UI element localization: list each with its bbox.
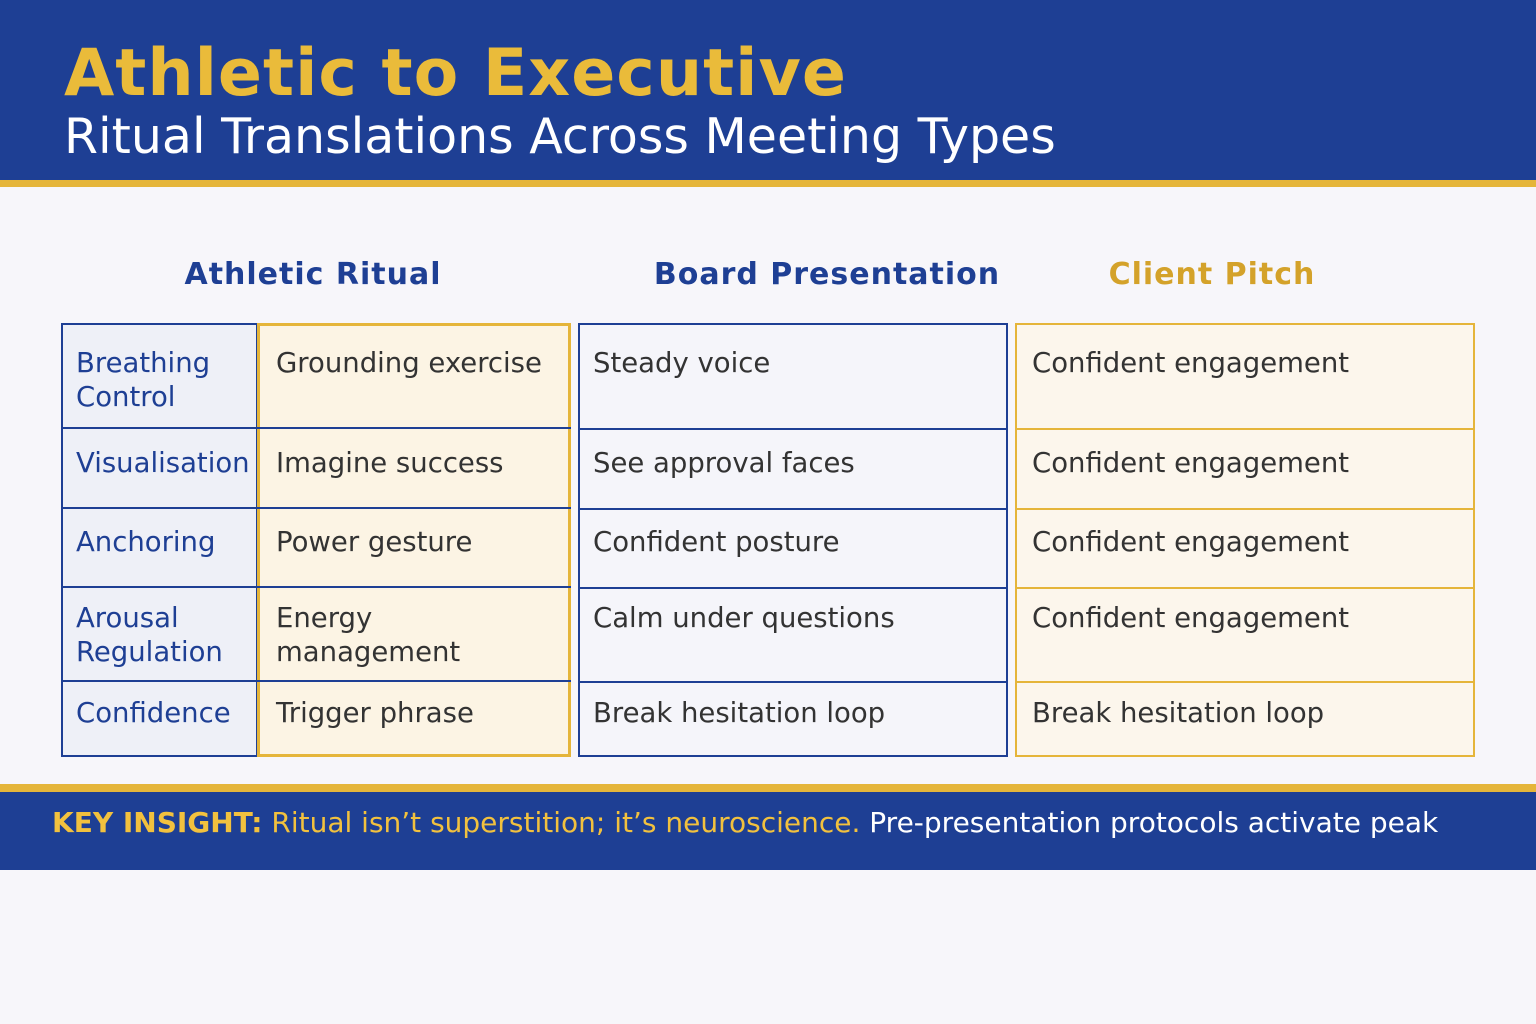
column headings <box>184 257 1315 292</box>
athletic techniques column <box>257 323 571 757</box>
table: board presentation <box>578 323 1008 757</box>
table: board presentation: Break hesitation loop <box>593 697 885 729</box>
table: board presentation: See approval faces <box>593 447 855 479</box>
table: athletic ritual: Anchoring <box>76 526 215 558</box>
subtitle: Ritual Translations Across Meeting Types <box>64 108 1056 165</box>
table: athletic ritual: Breathing <box>76 347 210 379</box>
table: athletic ritual: Visualisation <box>76 447 250 479</box>
table: board presentation: Calm under questions <box>593 602 895 634</box>
table: board presentation: Confident posture <box>593 526 840 558</box>
table: athletic ritual: Power gesture <box>276 526 472 558</box>
table: athletic ritual: Regulation <box>76 636 223 668</box>
table: client pitch: Confident engagement <box>1032 526 1349 558</box>
table: athletic ritual: Grounding exercise <box>276 347 542 379</box>
table: board presentation: Steady voice <box>593 347 770 379</box>
footer key insight <box>0 784 1536 870</box>
heading: client pitch: Client Pitch <box>1109 257 1315 292</box>
table: athletic ritual: Control <box>76 381 175 413</box>
ritual names column <box>61 323 258 757</box>
table: client pitch: Confident engagement <box>1032 447 1349 479</box>
table: athletic ritual: Trigger phrase <box>276 697 474 729</box>
table: athletic ritual: Imagine success <box>276 447 504 479</box>
table: athletic ritual: Arousal <box>76 602 179 634</box>
table: athletic ritual: Confidence <box>76 697 231 729</box>
table: client pitch <box>1015 323 1475 757</box>
heading: athletic ritual: Athletic Ritual <box>184 257 442 292</box>
table: athletic ritual: management <box>276 636 460 668</box>
table: client pitch: Confident engagement <box>1032 602 1349 634</box>
table: athletic ritual: Energy <box>276 602 372 634</box>
table: athletic ritual <box>61 323 571 757</box>
header band <box>0 0 1536 187</box>
table: client pitch: Break hesitation loop <box>1032 697 1324 729</box>
title: Athletic to Executive <box>64 36 847 111</box>
heading: board presentation: Board Presentation <box>654 257 1000 292</box>
table: client pitch: Confident engagement <box>1032 347 1349 379</box>
footer key insight: KEY INSIGHT: Ritual isn’t superstition; it’s neuroscience. Pre-presentation protocols activate peak <box>52 806 1438 839</box>
